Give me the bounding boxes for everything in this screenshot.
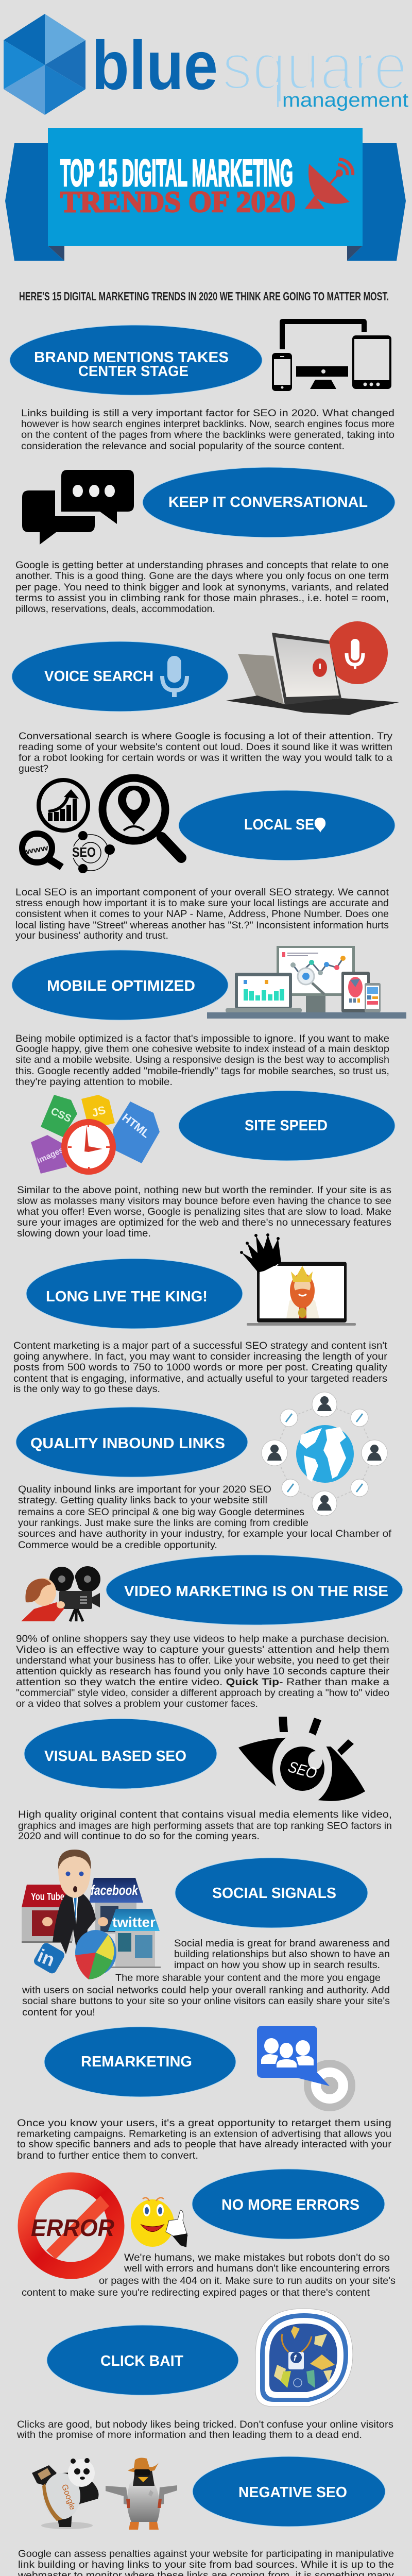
- heading pill: [47, 2325, 238, 2395]
- body text: on the content of the pages from where the backlinks were generated, taking into: [21, 430, 394, 440]
- body text: Google is getting better at understanding phrases and concepts that relate to one: [15, 560, 389, 571]
- body text: [19, 731, 393, 774]
- illustration: devices with charts: [207, 946, 406, 1019]
- icon: error prohibition sign: [26, 2181, 116, 2270]
- body text: attention so they watch the entire video. Quick Tip - Rather than make a: [16, 1677, 390, 1688]
- body text: site and a mobile website. Using a responsive design is the best way to accomplish: [15, 1055, 389, 1065]
- body text: graphics and images are high performing assets that are top ranking SEO factors in: [18, 1821, 392, 1832]
- body text: well with errors and humans don't like encountering errors: [124, 2263, 390, 2274]
- body text: Google happy, give them one cohesive website to index instead of a main desktop: [15, 1044, 389, 1055]
- body text: another. This is a good thing. Gone are the days where you only focus on one term: [15, 571, 389, 582]
- body text: content for you!: [22, 2007, 95, 2018]
- body text: slow as molasses many visitors may bounce before even having the chance to see: [17, 1196, 391, 1207]
- body text: social share buttons to your site so your online visitors can easily share your site's: [22, 1996, 390, 2007]
- icon: satellite dish: [305, 159, 353, 209]
- section 8: quality inbound links: [16, 1392, 392, 1551]
- heading pill: SITE SPEED: [245, 1117, 328, 1134]
- illustration: laptop with voice search: [226, 621, 399, 715]
- body text: local listing have "Street" whereas another has "St.?" Inconsistent information hurts: [15, 920, 389, 931]
- heading pill: LOCAL SE: [244, 817, 314, 833]
- header logo: [4, 14, 408, 115]
- icon: fish bait badge: [255, 2309, 353, 2406]
- banner panel: [48, 128, 363, 246]
- body text: [15, 1033, 389, 1088]
- heading pill: [26, 1259, 243, 1329]
- body text: going anywhere. In fact, you may want to consider increasing the length of your: [13, 1351, 388, 1362]
- heading pill: LONG LIVE THE KING!: [46, 1289, 208, 1305]
- section 12: remarketing: [17, 2026, 392, 2161]
- heading pill: VIDEO MARKETING IS ON THE RISE: [124, 1583, 388, 1600]
- illustration: social media shops and man: in: [35, 1945, 58, 1971]
- section 1: brand mentions: [10, 319, 394, 452]
- body text: [16, 1634, 390, 1709]
- heading pill: REMARKETING: [81, 2054, 192, 2070]
- logo word: blue: blue: [92, 27, 218, 104]
- illustration: social media shops and man: facebook: [91, 1883, 139, 1898]
- body text: reading some of your website's content out loud. Does it sound like it was written: [19, 742, 392, 753]
- body text: remains a core SEO principal & one big way Google determines: [18, 1507, 304, 1518]
- illustration: social media shops and man: twitter: [112, 1914, 156, 1930]
- heading pill: VISUAL BASED SEO: [44, 1748, 186, 1765]
- body text: your rankings. Just make sure the links are coming from credible: [18, 1518, 308, 1529]
- heading pill: [179, 1091, 395, 1161]
- logo word: management: management: [282, 90, 408, 111]
- icon: seo eye: SEO: [286, 1758, 319, 1782]
- icon: fish bait badge: f: [294, 2354, 297, 2363]
- body text: Being mobile optimized is a factor that's impossible to ignore. If you want to make: [15, 1033, 389, 1044]
- body text: [22, 2252, 396, 2298]
- heading pill: [179, 790, 395, 860]
- body text: [16, 1185, 391, 1239]
- body text: Conversational search is where Google is focusing a lot of their attention. Try: [19, 731, 393, 742]
- body text: posts from 500 words to 750 to 1000 words or more per post. Creating quality: [13, 1362, 388, 1373]
- illustration: cameraman: [21, 1566, 100, 1621]
- body text: brand to further entice them to convert.: [17, 2150, 198, 2161]
- section 7: long live the king: [13, 1233, 388, 1395]
- heading pill: QUALITY INBOUND LINKS: [30, 1435, 225, 1452]
- body text: sources and have authority in your industry, for example your local Chamber of: [18, 1529, 392, 1539]
- icon: chat bubbles: [22, 470, 134, 545]
- body text: Once you know your users, it's a great opportunity to retarget them using: [17, 2118, 391, 2129]
- heading pill: SOCIAL SIGNALS: [212, 1885, 336, 1902]
- heading pill: CENTER STAGE: [78, 363, 188, 380]
- body text: or pages with the 404 on it. Make sure to run audits on your site's: [99, 2276, 396, 2286]
- icon: microphone: [162, 656, 187, 697]
- icon: responsive devices: [272, 319, 391, 391]
- section 11: social signals: [22, 1850, 390, 2018]
- icon: seo eye: [238, 1717, 365, 1806]
- section 14: click bait: [16, 2309, 393, 2441]
- body text: Links building is still a very important factor for SEO in 2020. What changed: [21, 408, 394, 419]
- body text: [17, 2118, 392, 2161]
- body text: [18, 2549, 394, 2576]
- body text: with users on social networks could help your overall ranking and authority. Add: [22, 1985, 390, 1996]
- illustration: web files and clock: CSS: [49, 1106, 73, 1125]
- body text: 2020 and will continue to do so for the coming years.: [18, 1831, 260, 1842]
- heading pill: [44, 2027, 236, 2097]
- illustration: panda kicking: Google: [60, 2483, 77, 2511]
- heading pill: [175, 1858, 368, 1928]
- illustration: social media shops and man: [22, 1850, 161, 1979]
- body text: terms to assist you in climbing rank for those main phrases., i.e. hotel = room,: [15, 593, 389, 604]
- heading pill: [106, 1555, 403, 1625]
- icon: audience target: [257, 2026, 355, 2111]
- section 9: video marketing: [16, 1555, 403, 1709]
- icon group: seo magnifiers: www: [25, 843, 49, 856]
- illustration: globe link network: [262, 1392, 387, 1516]
- heading pill: BRAND MENTIONS TAKES: [34, 349, 229, 366]
- illustration: king on laptop with crown: [240, 1233, 356, 1326]
- body text: [22, 1938, 390, 2018]
- body text: pillows, reservations, deals, accommodation.: [15, 604, 215, 615]
- body text: Content marketing is a major part of a successful SEO strategy and content isn't: [13, 1341, 388, 1351]
- section 10: visual based seo: [18, 1717, 392, 1842]
- icon: error prohibition sign: ERROR: [31, 2214, 114, 2241]
- illustration: web files and clock: HTML: [119, 1111, 152, 1140]
- body text: guest?: [19, 764, 48, 774]
- body text: impact on how you show up in search results.: [174, 1960, 380, 1971]
- heading pill: MOBILE OPTIMIZED: [47, 978, 195, 994]
- body text: they're paying attention to mobile.: [15, 1077, 173, 1088]
- body text: strategy. Getting quality links back to your website still: [18, 1495, 267, 1506]
- illustration: panda kicking: [32, 2458, 99, 2529]
- illustration: web files and clock: images: [36, 1146, 65, 1165]
- heading pill: [24, 1719, 217, 1789]
- body text: Video is an effective way to capture your guests' attention and help them: [16, 1645, 389, 1655]
- body text: Local SEO is an important component of your overall SEO strategy. We cannot: [15, 887, 389, 898]
- body text: for a robot looking for certain words or was it written the way you would talk to a: [19, 753, 392, 764]
- heading pill: [12, 950, 228, 1020]
- body text: Google can assess penalties against your website for participating in manipulative: [18, 2549, 394, 2560]
- heading pill: [10, 325, 262, 395]
- body text: link building or having links to your site from bad sources. While it is up to the: [18, 2560, 394, 2570]
- body text: slowing down your load time.: [17, 1228, 151, 1239]
- icon: logo hexagon: [4, 14, 85, 115]
- body text: this. Google recently added "mobile-friendly" tags for mobile searches, so trust us,: [15, 1066, 389, 1077]
- body text: We're humans, we make mistakes but robots don't do so: [124, 2252, 390, 2263]
- body text: [18, 1484, 392, 1551]
- heading pill: [193, 2456, 385, 2527]
- body text: attention quickly as research has found you only have 10 seconds capture their: [16, 1666, 390, 1677]
- body text: Commerce would be a credible opportunity.: [18, 1540, 217, 1551]
- illustration: social media shops and man: You Tube: [31, 1891, 64, 1903]
- section 15: negative seo: [18, 2456, 394, 2576]
- body text: [15, 560, 389, 615]
- illustration: penguin sheriff: [106, 2458, 177, 2530]
- body text: remarketing campaigns. Remarketing is an extension of advertising that allows you: [17, 2129, 391, 2140]
- body text: is the only way to go these days.: [13, 1384, 160, 1395]
- heading pill: NO MORE ERRORS: [221, 2197, 359, 2213]
- body text: stress enough how important it is to make sure your local listings are accurate and: [15, 898, 389, 909]
- body text: "commercial" style video, consider a different approach by creating a "how to" video: [16, 1688, 389, 1699]
- body text: High quality original content that contains visual media elements like video,: [18, 1809, 392, 1820]
- body text: however is how search engines interpret backlinks. Now, search engines focus more: [21, 419, 394, 430]
- body text: or a video that solves a problem your customer faces.: [16, 1699, 258, 1709]
- heading pill: [16, 1407, 248, 1477]
- body text: The more sharable your content and the more you engage: [115, 1973, 381, 1984]
- body text: consideration the relevance and social popularity of the source content.: [21, 441, 345, 452]
- section 13: no more errors: [22, 2169, 396, 2298]
- title banner: [5, 128, 406, 261]
- illustration: web files and clock: [31, 1095, 160, 1174]
- body text: what you offer! Even worse, Google is penalizing sites that are slow to load. Make: [16, 1207, 391, 1217]
- icon group: seo magnifiers: SEO: [72, 844, 96, 860]
- icon: map pin letter: [315, 818, 325, 833]
- body text: [15, 887, 389, 941]
- section 2: keep it conversational: [15, 467, 395, 615]
- heading pill: KEEP IT CONVERSATIONAL: [168, 494, 368, 511]
- banner ribbon tails: [5, 143, 406, 261]
- section 4: local seo: [15, 778, 395, 941]
- body text: with the promise of more information and then leading them to a dead end.: [16, 2430, 362, 2441]
- heading pill: NEGATIVE SEO: [238, 2484, 347, 2501]
- body text: understand what your business has to offer. Like your website, you need to get their: [16, 1655, 390, 1666]
- body text: [18, 1809, 392, 1842]
- title line 2: TRENDS OF 2020: [60, 185, 296, 218]
- body text: sure your images are optimized for the web and there's no unnecessary features: [17, 1217, 391, 1228]
- icon group: seo magnifiers: [22, 778, 181, 873]
- body text: building relationships but also shown to have an: [174, 1949, 390, 1960]
- body text: per page. You need to think bigger and look at synonyms, variants, and related: [15, 582, 389, 593]
- icon: smiley thumbs up: [131, 2198, 187, 2247]
- body text: to show specific banners and ads to people that have already interacted with your: [17, 2139, 392, 2150]
- body text: Social media is great for brand awareness and: [174, 1938, 390, 1949]
- body text: Quality inbound links are important for your 2020 SEO: [18, 1484, 271, 1495]
- body text: your business' authority and trust.: [15, 930, 168, 941]
- heading pill: CLICK BAIT: [100, 2353, 183, 2369]
- body text: [13, 1341, 388, 1395]
- body text: content to make sure you're redirecting expired pages or that there's content: [22, 2287, 370, 2298]
- section 3: voice search: [12, 621, 399, 774]
- body text: 90% of online shoppers say they use videos to help make a purchase decision.: [16, 1634, 389, 1645]
- illustration: web files and clock: JS: [90, 1104, 107, 1120]
- heading pill: [143, 467, 395, 537]
- body text: Clicks are good, but nobody likes being tricked. Don't confuse your online visitors: [17, 2419, 393, 2430]
- section 5: mobile optimized: [12, 946, 406, 1088]
- body text: [16, 2419, 393, 2441]
- heading pill: [12, 641, 228, 711]
- body text: Similar to the above point, nothing new but worth the reminder. If your site is as: [17, 1185, 391, 1196]
- body text: consistent when it comes to your NAP - Name, Address, Phone Number. Does one: [15, 909, 389, 920]
- heading pill: [192, 2169, 385, 2239]
- body text: [21, 408, 394, 452]
- heading pill: VOICE SEARCH: [44, 668, 153, 685]
- body text: content that is engaging, informative, and actually useful to your targeted readers: [13, 1374, 387, 1384]
- section 6: site speed: [16, 1091, 395, 1239]
